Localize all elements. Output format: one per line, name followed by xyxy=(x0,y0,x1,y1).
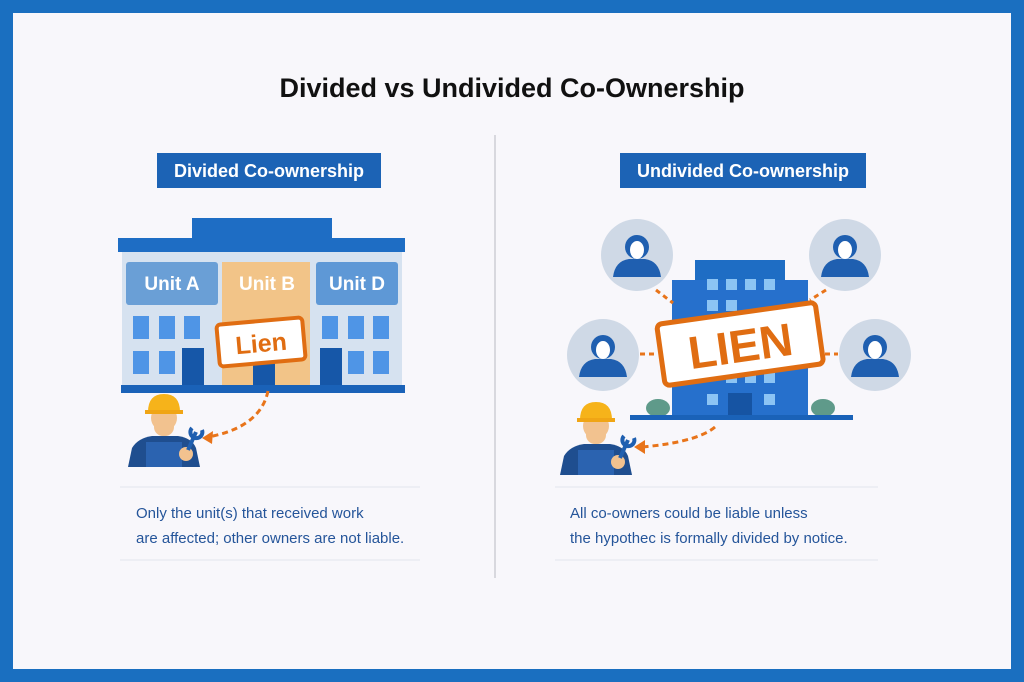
text: undivided note: All co-owners could be liable unless xyxy=(570,505,808,522)
icon: worker left xyxy=(128,394,202,467)
heading: undivided xyxy=(620,153,866,188)
stamp: LIEN xyxy=(657,302,824,386)
heading: divided: Divided Co-ownership xyxy=(174,161,364,181)
text: undivided note: the hypothec is formally divided by notice. xyxy=(570,530,848,547)
text: divided note: Only the unit(s) that received work xyxy=(136,505,364,522)
heading: divided xyxy=(157,153,381,188)
illustration: undivided building xyxy=(630,260,853,454)
stamp: LIEN: LIEN xyxy=(685,313,796,379)
illustration: divided building xyxy=(118,218,405,444)
illustration: divided building: Unit D xyxy=(329,274,385,295)
icon: worker right xyxy=(560,402,634,475)
icons: co-owners xyxy=(567,219,911,391)
stamp: Lien: Lien xyxy=(234,328,288,360)
text: divided note xyxy=(136,505,404,547)
connectors xyxy=(640,290,838,354)
arrow xyxy=(642,427,715,447)
illustration: divided building: Unit B xyxy=(239,274,295,295)
title: Divided vs Undivided Co-Ownership xyxy=(279,73,745,103)
stamp: Lien xyxy=(216,317,306,367)
text: divided note: are affected; other owners are not liable. xyxy=(136,530,404,547)
heading: undivided: Undivided Co-ownership xyxy=(637,161,849,181)
illustration: divided building: Unit A xyxy=(144,274,200,295)
text: undivided note xyxy=(570,505,848,547)
arrow xyxy=(208,391,268,437)
